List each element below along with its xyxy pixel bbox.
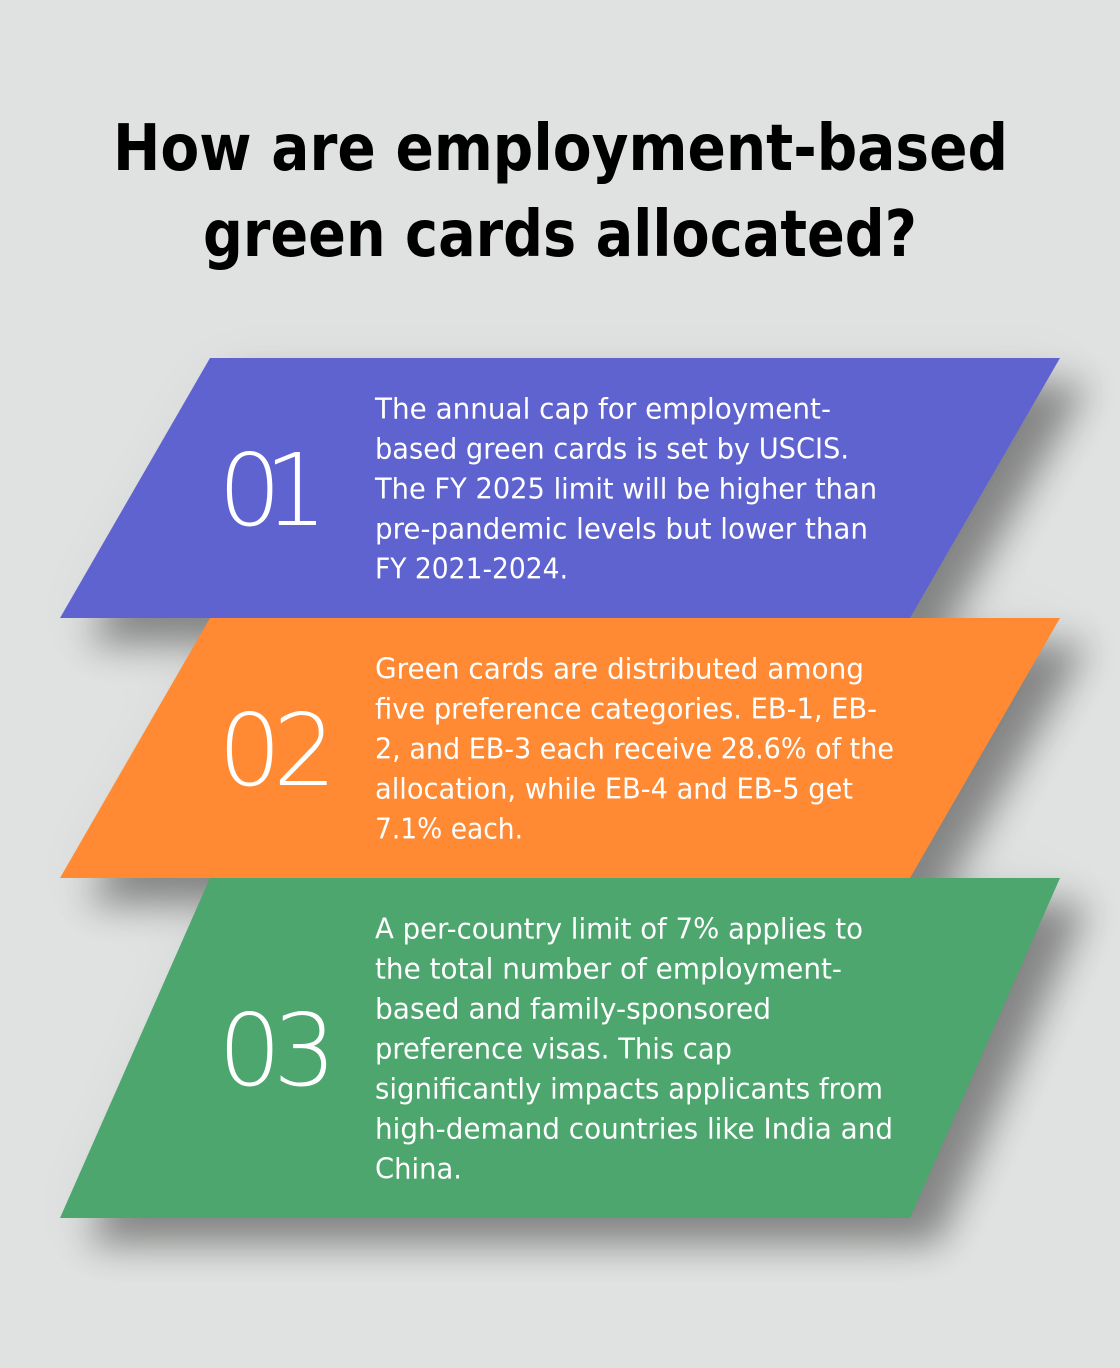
text: step 02 description: Green cards are distributed among [375, 652, 864, 686]
panel: step 02 [60, 618, 1060, 878]
text: step 01 description [374, 392, 877, 586]
text: step 03 description: significantly impacts applicants from [375, 1072, 883, 1106]
text: step 01 description: The FY 2025 limit will be higher than [374, 472, 877, 506]
text: step 01 description: based green cards is set by USCIS. [375, 432, 849, 466]
title: How are employment-based [113, 112, 1008, 186]
text: step 02 description: five preference categories. EB-1, EB- [375, 692, 877, 726]
number 03: 03 [218, 992, 337, 1109]
text: step 02 description: allocation, while EB-4 and EB-5 get [375, 772, 853, 806]
panel shadows [75, 373, 1088, 1244]
title [113, 112, 1008, 272]
number 02: 02 [218, 692, 337, 809]
text: step 01 description: FY 2021-2024. [375, 552, 568, 586]
text: step 01 description: pre-pandemic levels but lower than [375, 512, 868, 546]
text: step 03 description [375, 912, 893, 1186]
text: step 02 description [375, 652, 894, 846]
text: step 03 description: preference visas. This cap [375, 1032, 732, 1066]
title: green cards allocated? [203, 198, 917, 272]
text: step 02 description: 2, and EB-3 each receive 28.6% of the [375, 732, 894, 766]
text: step 03 description: based and family-sponsored [375, 992, 771, 1026]
panel: step 01 [60, 358, 1060, 618]
number 01: 01 [218, 432, 328, 549]
text: step 03 description: high-demand countries like India and [375, 1112, 893, 1146]
text: step 03 description: the total number of employment- [375, 952, 842, 986]
text: step 03 description: A per-country limit of 7% applies to [375, 912, 863, 946]
text: step 03 description: China. [375, 1152, 462, 1186]
text: step 02 description: 7.1% each. [375, 812, 523, 846]
text: step 01 description: The annual cap for employment- [374, 392, 831, 426]
panel: step 03 [60, 878, 1060, 1218]
